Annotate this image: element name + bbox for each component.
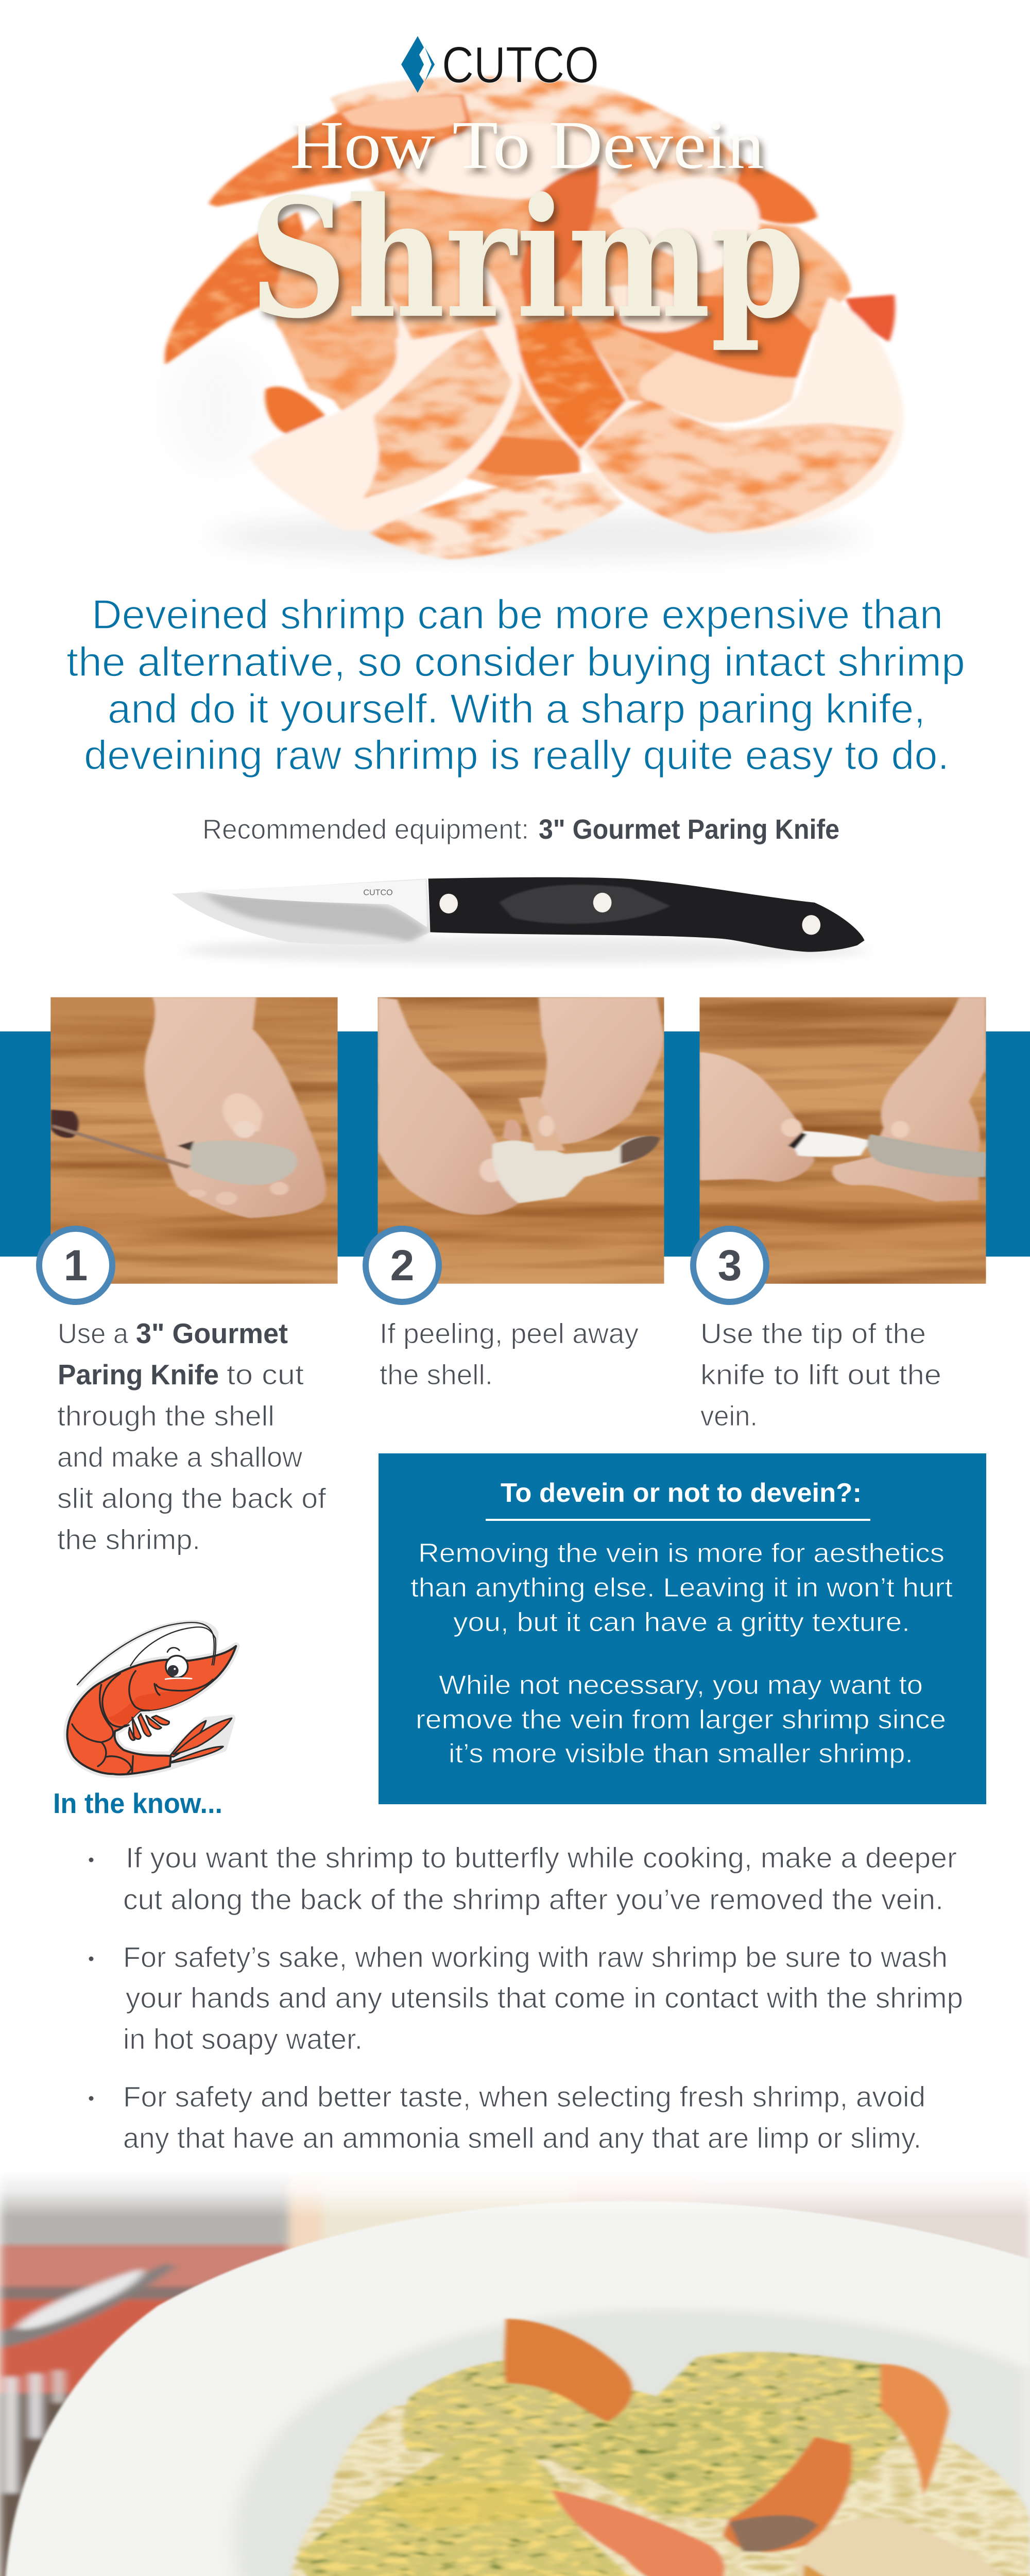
tip 1: cut along the back of the shrimp after you’ve removed the vein. [123, 1883, 943, 1916]
icon: blue diamond mark [401, 36, 435, 93]
step 1 text [57, 1317, 327, 1555]
recommended equipment line: 3" Gourmet Paring Knife [539, 814, 839, 845]
tip 1: If you want the shrimp to butterfly while cooking, make a deeper [126, 1841, 957, 1874]
step 1 text: to cut [227, 1359, 304, 1391]
panel body text: it’s more visible than smaller shrimp. [449, 1739, 913, 1769]
bottom photo: plated shrimp with pasta [0, 2171, 1030, 2576]
hero photo: pile of cooked shrimp [165, 77, 904, 559]
step 1 text: Paring Knife [58, 1359, 219, 1391]
intro paragraph: and do it yourself. With a sharp paring knife, [108, 686, 925, 732]
panel body text: remove the vein from larger shrimp since [416, 1705, 946, 1735]
tip 2: For safety’s sake, when working with raw shrimp be sure to wash [123, 1941, 948, 1973]
step 1 text: slit along the back of [57, 1482, 327, 1514]
step badge 1: 1 [64, 1241, 88, 1290]
intro paragraph: deveining raw shrimp is really quite easy to do. [84, 732, 949, 778]
panel body text: While not necessary, you may want to [439, 1670, 923, 1700]
recommended equipment line: Recommended equipment: [202, 814, 529, 845]
logo wordmark: CUTCO [442, 36, 599, 93]
step 1 text: 3" Gourmet [136, 1317, 288, 1349]
step badge 1 [39, 1229, 112, 1302]
photo: step 3 lifting vein [699, 997, 986, 1284]
photo: step 1 cutting shell [50, 997, 338, 1284]
knife photo: CUTCO [363, 888, 393, 897]
logo: CUTCO [401, 36, 599, 93]
tip 3: any that have an ammonia smell and any that are limp or slimy. [123, 2122, 921, 2154]
recommended equipment line [202, 814, 839, 845]
intro paragraph [66, 591, 965, 778]
step 1 text: Use a [58, 1317, 128, 1349]
step 3 text: Use the tip of the [700, 1317, 926, 1349]
panel: to devein or not [379, 1453, 986, 1804]
step 3 text: vein. [700, 1400, 758, 1432]
step badge 2 [366, 1229, 439, 1302]
step 3 text [700, 1317, 941, 1432]
blue band behind step photos [0, 1031, 1030, 1257]
tip 2: your hands and any utensils that come in contact with the shrimp [126, 1981, 963, 2014]
title line: Shrimp: Shrimp [249, 162, 805, 354]
knife photo [172, 877, 867, 963]
panel body text [410, 1538, 953, 1769]
icon: cartoon shrimp mascot [67, 1622, 236, 1774]
panel body text: than anything else. Leaving it in won’t hurt [410, 1573, 953, 1603]
step badge 3: 3 [718, 1241, 742, 1290]
heading: In the know: In the know... [53, 1787, 222, 1819]
intro paragraph: the alternative, so consider buying intact shrimp [66, 639, 965, 685]
step badge 2: 2 [390, 1241, 414, 1290]
tip 1 [89, 1841, 957, 1916]
tip 2 [89, 1941, 963, 2055]
tip 3: For safety and better taste, when selecting fresh shrimp, avoid [123, 2080, 925, 2113]
step 3 text: knife to lift out the [700, 1359, 941, 1391]
title [249, 107, 805, 354]
title line: How To Devein: How To Devein [290, 107, 764, 183]
step badge 3 [693, 1229, 766, 1302]
step 2 text [380, 1317, 639, 1391]
tip 3 [89, 2080, 925, 2154]
step 2 text: the shell. [380, 1359, 493, 1391]
step photos [50, 997, 986, 1284]
step 1 text: the shrimp. [57, 1523, 200, 1555]
panel body text: you, but it can have a gritty texture. [453, 1607, 910, 1637]
tips list [89, 1841, 963, 2154]
intro paragraph: Deveined shrimp can be more expensive than [92, 591, 943, 637]
panel body text: Removing the vein is more for aesthetics [418, 1538, 945, 1568]
photo: step 2 peeling shell [377, 997, 664, 1284]
tip 2: in hot soapy water. [123, 2023, 363, 2055]
panel heading: To devein or not to devein?: [501, 1478, 862, 1508]
step 2 text: If peeling, peel away [380, 1317, 639, 1349]
step 1 text: and make a shallow [57, 1441, 302, 1473]
step 1 text: through the shell [57, 1400, 274, 1432]
